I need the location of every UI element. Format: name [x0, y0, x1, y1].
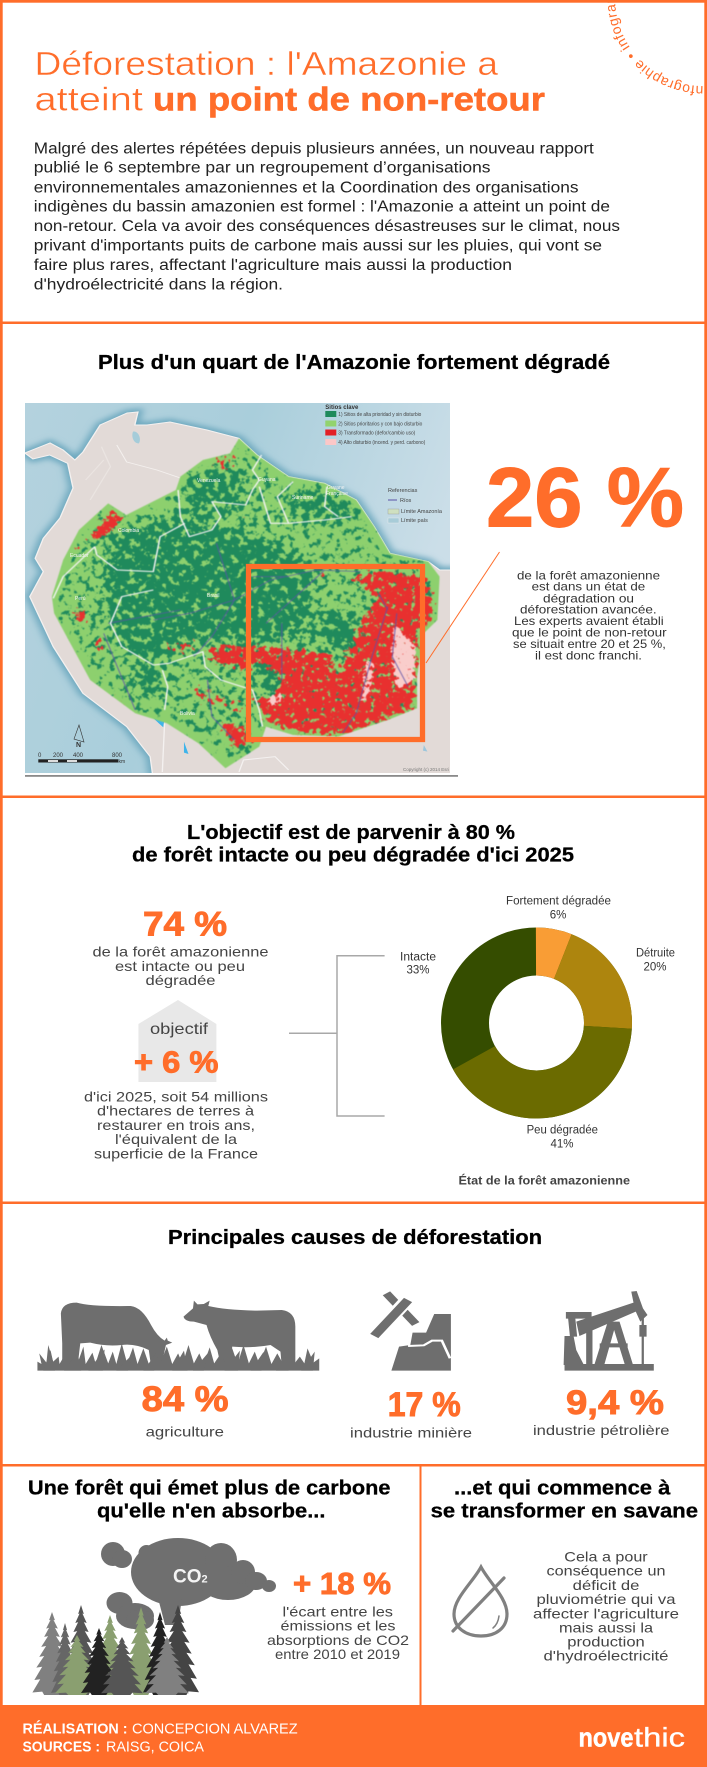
logo: novethic: nove [578, 1723, 634, 1753]
intro text: environnementales amazoniennes et la Coordination des organisations [34, 179, 579, 196]
scale bar and north arrow: km [118, 759, 125, 765]
logo: novethic: thic [634, 1723, 685, 1753]
scale bar and north arrow: Copyright (c) 2014 Esri [403, 767, 449, 772]
degraded area layer [52, 452, 436, 748]
heading: L'objectif est de parvenir à 80 % [187, 822, 515, 844]
intro text: Malgré des alertes répétées depuis plusieurs années, un nouveau rapport [34, 140, 595, 157]
icon: pickaxe and rocks [374, 1293, 451, 1371]
stat description: que le point de non-retour [512, 626, 667, 640]
stat description: Les experts avaient établi [514, 614, 664, 628]
logo: novethic [578, 1723, 685, 1753]
stat description: entre 2010 et 2019 [275, 1646, 400, 1662]
stat description: dégradée [146, 972, 216, 988]
stat description: déforestation avancée. [520, 603, 657, 617]
title: atteint [34, 81, 143, 118]
stat description: se situait entre 20 et 25 %, [513, 637, 666, 651]
intro text [34, 140, 620, 293]
stat description [267, 1604, 409, 1662]
country labels: Ecuador [70, 553, 89, 559]
objective description: d'hectares de terres à [97, 1103, 254, 1119]
stat description: de la forêt amazonienne [517, 568, 660, 582]
scale bar and north arrow: 200 [53, 753, 64, 759]
map legend: Sitios clave [325, 405, 359, 411]
stat description: dégradation ou [543, 591, 634, 605]
donut labels: Détruite [636, 948, 675, 960]
icon: CO2 cloud [101, 1538, 276, 1630]
credits: RÉALISATION : [22, 1720, 128, 1737]
stat description: est intacte ou peu [115, 958, 245, 974]
country labels: Brasil [207, 593, 220, 599]
heading [431, 1477, 698, 1523]
stat description [512, 568, 667, 663]
CO2 label: CO2 [173, 1567, 208, 1588]
donut labels: 20% [643, 962, 667, 974]
objective description [84, 1089, 268, 1161]
map legend: Ríos [400, 498, 412, 504]
intro text: publié le 6 septembre par un regroupement d’organisations [34, 160, 491, 177]
title: Déforestation : l'Amazonie a [34, 45, 499, 82]
stat: 74 %: 74 % [143, 906, 227, 944]
highlight rectangle on map [248, 566, 422, 740]
country borders [53, 455, 352, 727]
panel: carbon [28, 1477, 409, 1695]
panel: savanna [431, 1477, 698, 1664]
panel: header [34, 2, 702, 293]
objective label: objectif [150, 1021, 209, 1038]
savanna description: Cela a pour [564, 1549, 648, 1565]
icon: oil pump [564, 1291, 654, 1371]
savanna description: pluviométrie qui va [536, 1591, 676, 1607]
panel: objective section [84, 822, 675, 1187]
rivers [104, 543, 408, 740]
scale bar and north arrow: 400 [73, 753, 84, 759]
heading [28, 1477, 390, 1523]
map legend: 3) Transformado (defor/cambio uso) [338, 431, 415, 437]
map legend: 4) Alto disturbio (incend. y perd. carbono) [338, 440, 425, 446]
icon: conifer trees [32, 1605, 199, 1695]
donut labels: Fortement dégradée [506, 895, 611, 907]
callout line [426, 552, 500, 663]
stat description: l'écart entre les [282, 1604, 393, 1620]
map legend: Límite país [401, 518, 428, 524]
intro text: indigènes du bassin amazonien est formel : l'Amazonie a atteint un point de [34, 199, 610, 216]
intro text: privant d'importants puits de carbone mais aussi sur les pluies, qui vont se [34, 237, 602, 254]
credits: RAISG, COICA [106, 1738, 204, 1755]
stat description: émissions et les [280, 1618, 396, 1634]
label: agriculture: agriculture [146, 1424, 224, 1440]
stat description [92, 944, 269, 988]
map of the Amazon [0, 403, 460, 780]
stat: + 6 %: + 6 % [134, 1045, 218, 1080]
stat: + 18 %: + 18 % [293, 1566, 391, 1601]
savanna description: production [567, 1634, 645, 1650]
heading: Principales causes de déforestation [168, 1227, 542, 1249]
savanna description [533, 1549, 679, 1664]
scale bar and north arrow: N [76, 742, 81, 749]
dense forest layer [52, 438, 440, 768]
scale bar and north arrow: 800 [112, 753, 123, 759]
donut labels [400, 895, 675, 1150]
chart caption: État de la forêt amazonienne [458, 1172, 630, 1187]
heading: Plus d'un quart de l'Amazonie fortement dégradé [98, 352, 610, 374]
land mass [25, 412, 455, 780]
country labels: Guyana [258, 477, 276, 483]
objective description: d'ici 2025, soit 54 millions [84, 1089, 268, 1105]
country labels: Perú [75, 596, 86, 602]
country labels: Bolivia [180, 711, 195, 717]
credits: CONCEPCION ALVAREZ [132, 1720, 298, 1737]
country labels: Venezuela [197, 478, 221, 484]
donut labels: 33% [406, 964, 430, 976]
big stat: 26 %: 26 % [486, 450, 684, 544]
bracket connector [289, 956, 385, 1116]
intro text: faire plus rares, affectant l'agriculture mais aussi la production [34, 257, 512, 274]
amazon biome [51, 438, 440, 768]
savanna description: mais aussi la [559, 1619, 653, 1635]
objective description: l'équivalent de la [115, 1131, 237, 1147]
heading: qu'elle n'en absorbe... [97, 1501, 326, 1523]
stat description: est dans un état de [532, 580, 646, 594]
stat description: absorptions de CO2 [267, 1632, 409, 1648]
panel: causes [37, 1227, 670, 1440]
donut labels: Intacte [400, 952, 436, 964]
heading: Une forêt qui émet plus de carbone [28, 1477, 390, 1499]
stat description: de la forêt amazonienne [92, 944, 269, 960]
map legend: Referencias [388, 488, 418, 494]
pale disturbed areas [266, 620, 417, 708]
savanna description: affecter l'agriculture [533, 1605, 679, 1621]
donut labels: 41% [550, 1138, 574, 1150]
footer [0, 1705, 707, 1767]
map legend: 2) Sitios prioritarios y con bajo disturbio [338, 421, 422, 427]
icon: crossed water drop [453, 1567, 507, 1636]
objective description: restaurer en trois ans, [97, 1117, 255, 1133]
donut labels: 6% [550, 909, 566, 921]
stat: 84 %: 84 % [142, 1380, 229, 1419]
credits: SOURCES : [22, 1738, 100, 1755]
country labels: Colombia [118, 528, 139, 534]
heading: de forêt intacte ou peu dégradée d'ici 2025 [132, 845, 574, 867]
intro text: non-retour. Cela va avoir des conséquences désastreuses sur le climat, nous [34, 218, 620, 235]
heading [132, 822, 574, 867]
icon: objective house [138, 1000, 216, 1082]
country labels: Guyane [327, 485, 345, 491]
country labels [70, 477, 348, 717]
map legend: 1) Sitios de alta prioridad y sin disturbio [338, 412, 421, 418]
donut chart [465, 952, 608, 1094]
savanna description: déficit de [573, 1577, 640, 1593]
scale bar and north arrow [38, 725, 449, 772]
label: oil: industrie pétrolière [533, 1422, 670, 1438]
label: mining: industrie minière [350, 1424, 472, 1440]
title: un point de non-retour [153, 81, 545, 118]
heading: ...et qui commence à [454, 1477, 671, 1499]
stat description: il est donc franchi. [535, 649, 642, 663]
country labels: Française [326, 491, 348, 497]
intro text: d'hydroélectricité dans la région. [34, 276, 283, 293]
savanna description: d'hydroélectricité [544, 1648, 669, 1664]
title [34, 45, 545, 118]
map legend: Límite Amazonía [401, 509, 443, 515]
icon: cows in grass [37, 1301, 319, 1371]
heading: se transformer en savane [431, 1501, 698, 1523]
stat: 17 %: 17 % [388, 1386, 461, 1424]
objective description: superficie de la France [94, 1145, 258, 1161]
panel: map section [0, 352, 684, 780]
donut labels: Peu dégradée [527, 1124, 598, 1136]
country labels: Suriname [292, 495, 314, 501]
stat: 9,4 %: 9,4 % [566, 1384, 664, 1422]
map underline [25, 775, 458, 777]
savanna description: conséquence un [546, 1563, 666, 1579]
map legend [325, 405, 443, 524]
credits [22, 1720, 298, 1755]
scale bar and north arrow: 0 [38, 753, 42, 759]
